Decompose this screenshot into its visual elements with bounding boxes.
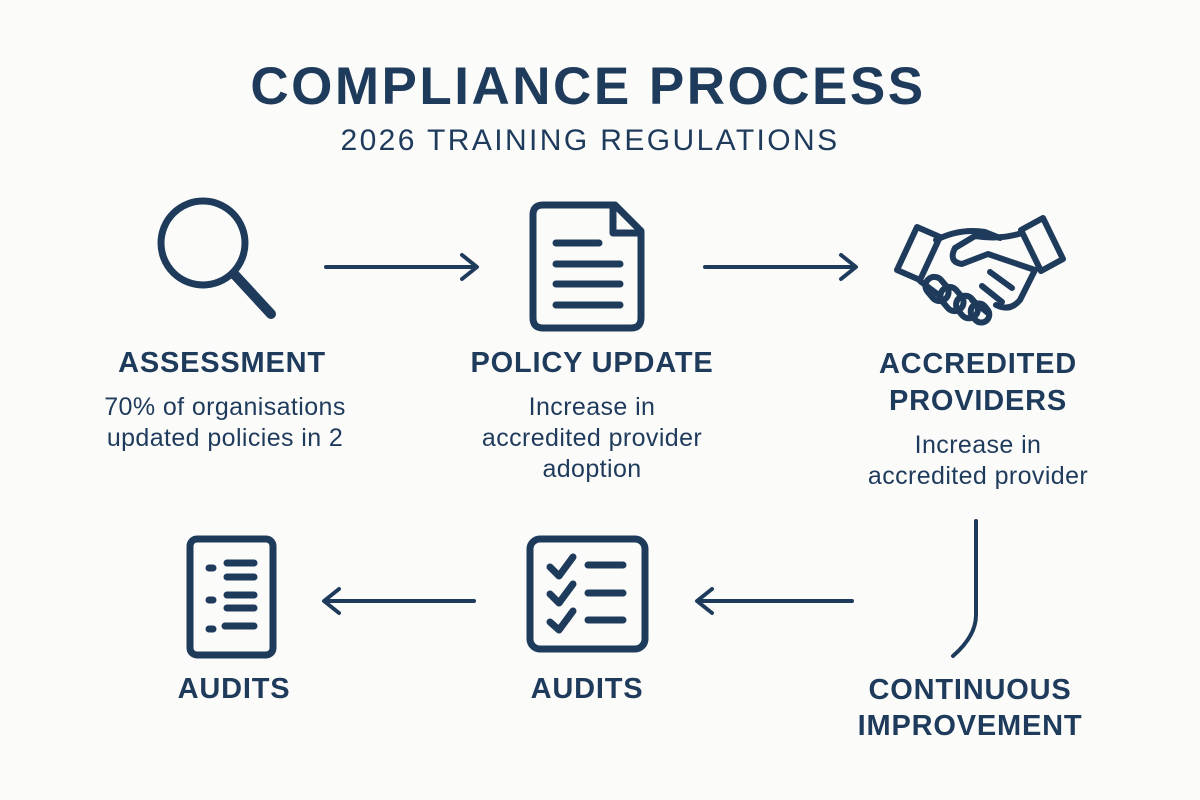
text: policy update [482,393,702,483]
icon: handshake [897,218,1063,326]
label: continuous improvement: IMPROVEMENT [858,710,1082,742]
text: accredited providers: accredited provider [868,462,1088,490]
text: policy update: adoption [542,455,642,483]
text: accredited providers: Increase in [915,431,1041,459]
text: policy update: accredited provider [482,424,702,452]
arrow 4 [324,589,474,613]
text: policy update: Increase in [529,393,655,421]
title: COMPLIANCE PROCESS [250,57,926,116]
icon: report document [190,539,273,655]
icon: checklist [530,539,645,649]
label: audits middle: AUDITS [531,673,643,705]
arrow 1 [326,255,477,279]
text: assessment [104,393,346,452]
label: audits left: AUDITS [178,673,290,705]
icon: document [533,205,641,328]
label: accredited providers [879,348,1077,417]
text: assessment: 70% of organisations [104,393,346,421]
label: assessment: ASSESSMENT [118,347,326,379]
label: continuous improvement: CONTINUOUS [869,674,1071,706]
subtitle: 2026 TRAINING REGULATIONS [340,124,840,157]
text: accredited providers [868,431,1088,490]
label: continuous improvement [858,674,1082,742]
connector curve [953,521,976,656]
icon: magnifier [161,201,271,314]
label: accredited providers: PROVIDERS [889,385,1067,417]
label: accredited providers: ACCREDITED [879,348,1077,380]
text: assessment: updated policies in 2 [107,424,343,452]
arrow 2 [705,255,856,279]
arrow 3 [697,589,852,613]
label: policy update: POLICY UPDATE [471,347,713,379]
